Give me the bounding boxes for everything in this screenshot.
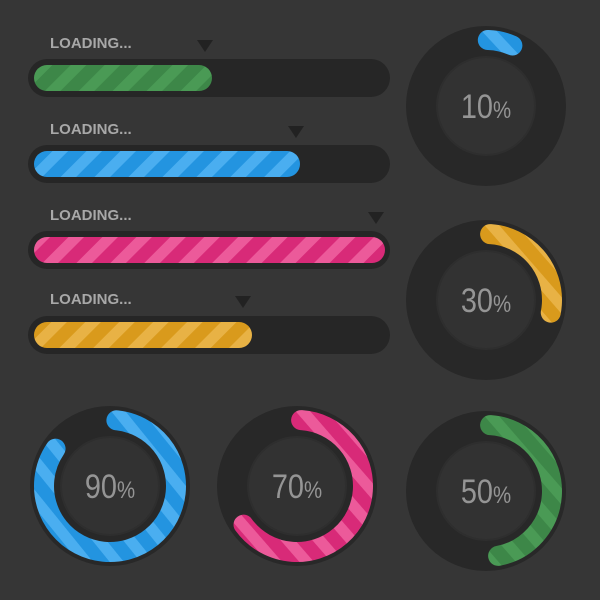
bar 1 green — [28, 35, 390, 97]
circle 30%: 30% — [461, 281, 511, 320]
circle 90% — [30, 406, 190, 566]
bar 4 yellow: LOADING... — [50, 291, 132, 308]
bar 3 pink — [28, 207, 390, 269]
circle 70% — [217, 406, 377, 566]
circle 50% — [406, 411, 566, 571]
circle 30% — [406, 220, 566, 380]
bar 4 yellow — [28, 291, 390, 354]
bar 1 green: LOADING... — [50, 35, 132, 52]
bar 2 blue — [28, 121, 390, 183]
circle 10%: 10% — [461, 87, 511, 126]
circle 70%: 70% — [272, 467, 322, 506]
bar 2 blue: LOADING... — [50, 121, 132, 138]
circle 50%: 50% — [461, 472, 511, 511]
circle 10% — [406, 26, 566, 186]
circle 90%: 90% — [85, 467, 135, 506]
bar 3 pink: LOADING... — [50, 207, 132, 224]
